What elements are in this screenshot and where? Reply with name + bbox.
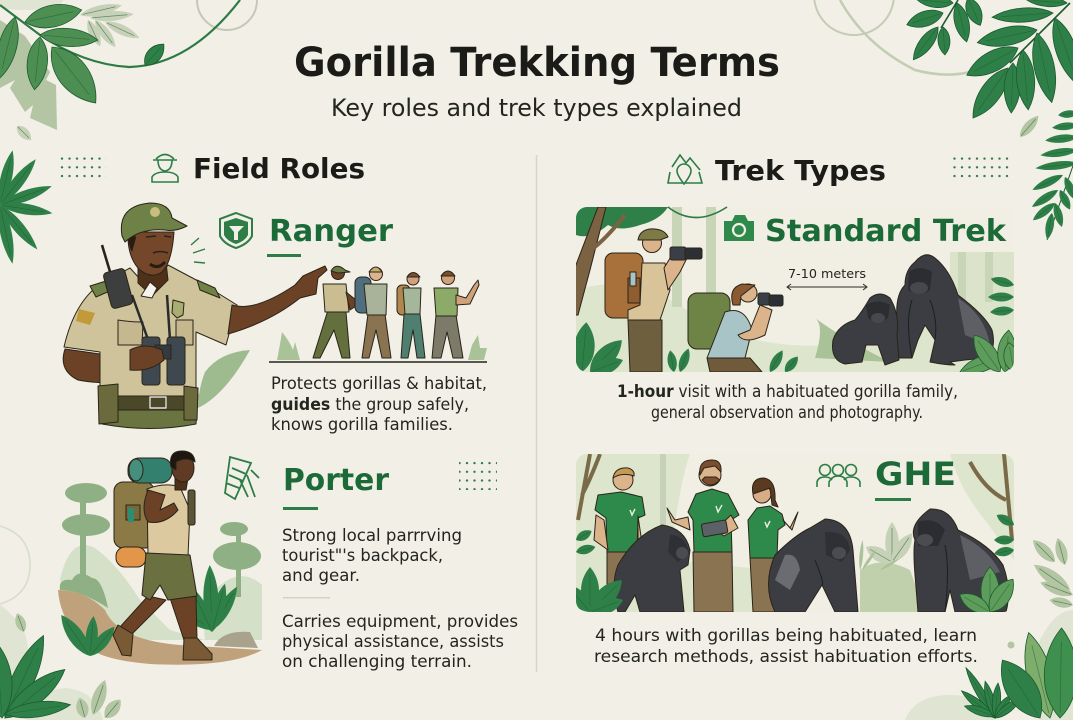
decoration: right frond (1030, 109, 1073, 240)
divider (283, 597, 330, 598)
text: standard trek description: general observation and photography. (651, 403, 923, 422)
decoration: left frond (0, 149, 54, 265)
text: porter summary: and gear. (282, 566, 360, 585)
icon: ranger person (152, 154, 178, 182)
icon: motion ticks (191, 238, 205, 263)
illustration: ranger pointing (63, 203, 327, 428)
subtitle: Key roles and trek types explained (331, 94, 742, 122)
text: ranger description: guides the group safely, (271, 395, 469, 414)
panel: standard trek (572, 207, 1021, 422)
decoration: top-left foliage (0, 0, 257, 144)
panel: ranger (63, 203, 487, 434)
illustration: porter on trail (55, 451, 262, 665)
icon: shield (220, 213, 252, 248)
large gorilla (896, 255, 993, 365)
distance label: 7-10 meters (788, 266, 866, 281)
heading: porter: Porter (283, 463, 389, 498)
decoration: bottom-left foliage (0, 605, 125, 720)
text: porter summary: tourist"'s backpack, (282, 546, 443, 565)
decoration: left side curve (0, 526, 30, 604)
shirt logos (630, 505, 770, 527)
heading: GHE: GHE (875, 455, 956, 493)
text: porter duties: physical assistance, assists (282, 632, 504, 651)
vine (668, 207, 727, 218)
illustration: photographers and gorillas (572, 207, 1021, 379)
heading: ranger: Ranger (269, 214, 393, 249)
small gorilla (832, 294, 899, 365)
text: standard trek description: 1-hour visit with a habituated gorilla family, (617, 382, 958, 401)
title: Gorilla Trekking Terms (294, 40, 780, 86)
heading: field roles: Field Roles (193, 152, 365, 185)
column divider (536, 155, 538, 672)
text: ranger description: knows gorilla families. (271, 415, 453, 434)
illustration: trekking group (277, 266, 487, 360)
arrow: distance (787, 284, 867, 290)
heading underline (875, 498, 911, 501)
text: GHE description: 4 hours with gorillas being habituated, learn (595, 626, 977, 645)
text: porter summary: Strong local parrrving (282, 526, 462, 545)
illustration: researchers and gorillas (562, 454, 1020, 619)
text: porter duties: on challenging terrain. (282, 652, 472, 671)
icon: camera (724, 215, 754, 241)
heading underline (267, 254, 301, 257)
gorilla two (768, 519, 858, 612)
text: ranger description (271, 374, 487, 434)
text: GHE description: research methods, assist habituation efforts. (594, 647, 978, 666)
dots: porter (459, 460, 497, 490)
icon: group of people (817, 464, 860, 487)
text: porter duties: Carries equipment, provides (282, 612, 518, 631)
gorilla three (913, 509, 1008, 612)
dots: trek types (951, 157, 1012, 181)
text: porter duties (282, 612, 518, 671)
text: standard trek description (617, 382, 958, 422)
gorilla one (614, 525, 690, 612)
heading underline (283, 507, 318, 510)
text: GHE description (594, 626, 978, 666)
dots: field roles (60, 157, 106, 181)
heading: trek types: Trek Types (715, 154, 886, 187)
heading: standard trek: Standard Trek (765, 214, 1007, 249)
decoration: top-right foliage (814, 0, 1073, 140)
ground line (269, 361, 487, 363)
panel: porter (55, 451, 518, 671)
icon: map mountain pin (668, 155, 702, 184)
panel: GHE (562, 454, 1020, 666)
text: porter summary (282, 526, 462, 585)
decoration: bottom-right foliage (905, 536, 1073, 720)
text: ranger description: Protects gorillas & habitat, (271, 374, 487, 393)
icon: folding frame (225, 457, 259, 499)
